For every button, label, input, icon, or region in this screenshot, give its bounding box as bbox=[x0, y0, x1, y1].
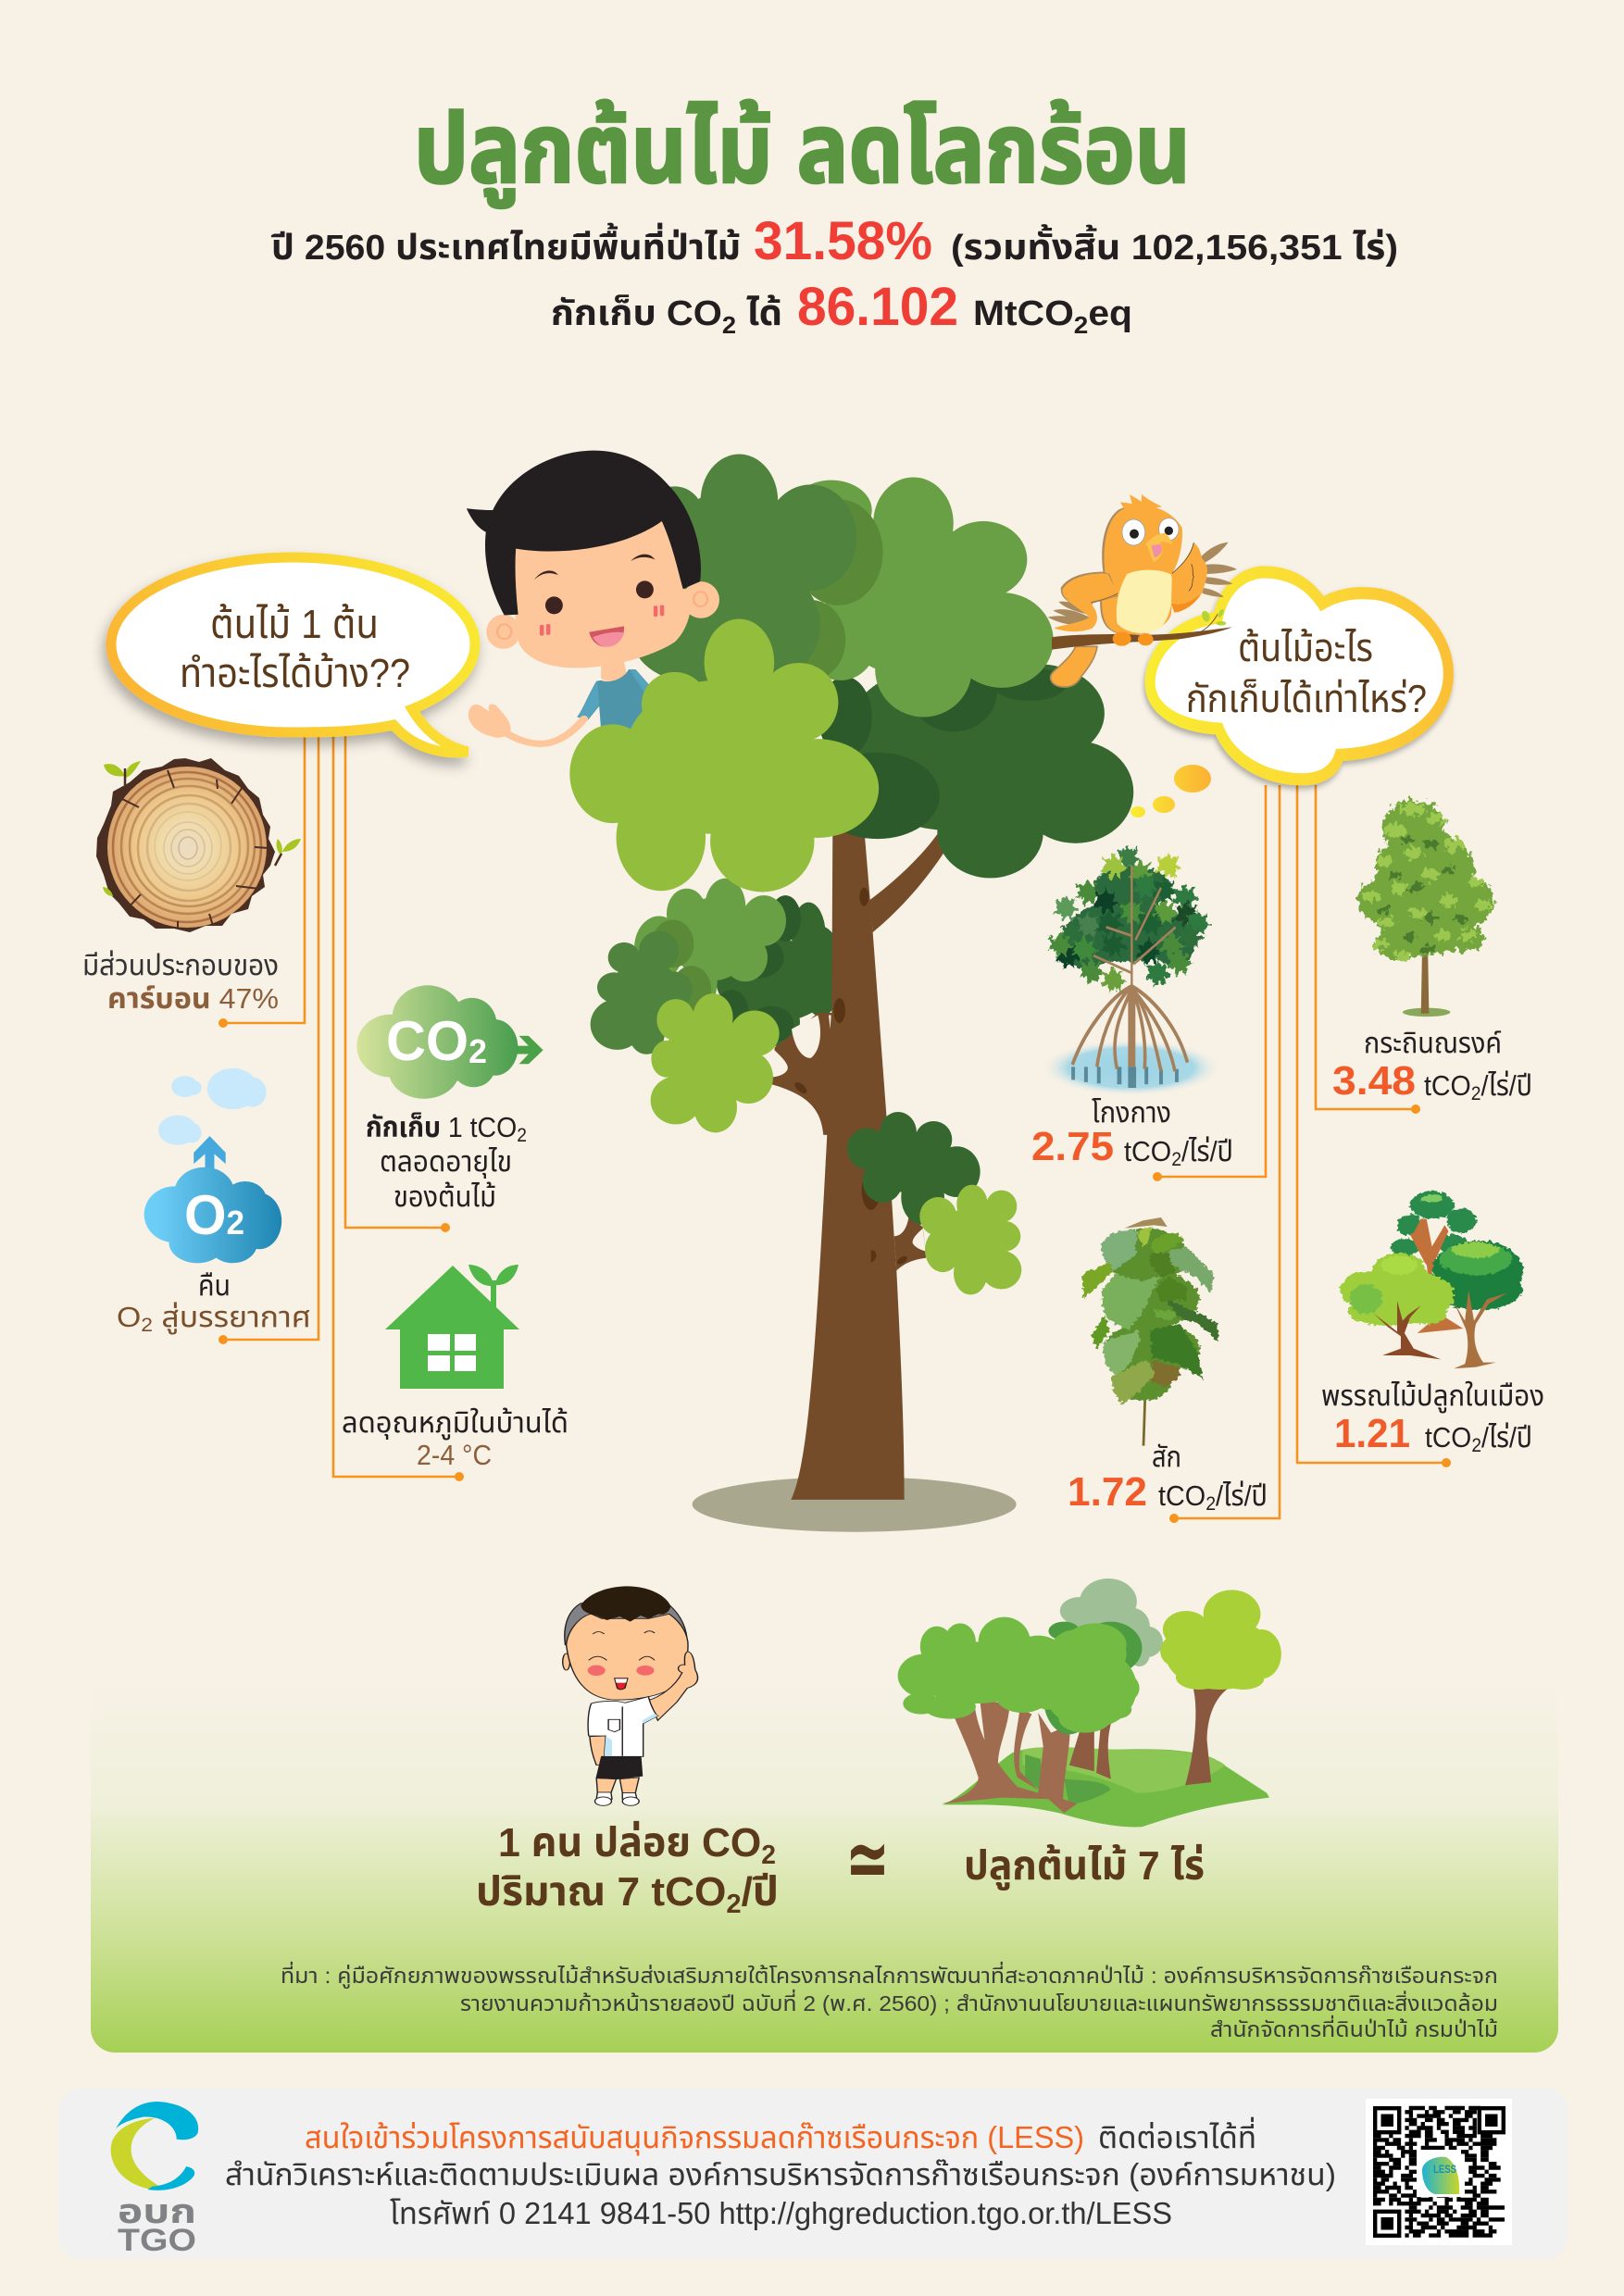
text: krathin rate: /ไร่/ปี bbox=[1481, 1069, 1532, 1102]
icon: O2 cloud with rising arrow bbox=[144, 1068, 281, 1263]
text: source note: รายงานความก้าวหน้ารายสองปี ฉบับที่ 2 (พ.ศ. 2560) ; สำนักงานนโยบายและแผนทรัพยากรธรรมชาติและสิ่งแวดล้อม bbox=[460, 1989, 1498, 2015]
icon: green house with sprout bbox=[385, 1265, 519, 1389]
logo: TGO: อบก bbox=[118, 2192, 196, 2230]
subtitle: carbon stored: eq bbox=[1088, 294, 1132, 333]
subtitle: carbon stored: 2 bbox=[722, 311, 736, 339]
subtitle: carbon stored: 2 bbox=[1074, 311, 1088, 339]
text: mangrove rate: โกงกาง bbox=[1092, 1096, 1171, 1129]
text: stores 1 tCO2 bbox=[366, 1111, 527, 1213]
text: krathin rate: tCO bbox=[1424, 1069, 1475, 1102]
text: stores 1 tCO2: ตลอดอายุไข bbox=[380, 1145, 512, 1179]
text: returns O2 to atmosphere bbox=[117, 1269, 311, 1336]
tree illustration with boy bbox=[467, 451, 1133, 1532]
text: one person emits CO2 bbox=[476, 1820, 779, 1919]
text: krathin rate bbox=[1332, 1027, 1532, 1104]
text: source note: ที่มา : คู่มือศักยภาพของพรรณไม้สำหรับส่งเสริมภายใต้โครงการกลไกการพัฒนาที่สะอาดภาคป่าไม้ : องค์การบริหารจัดการก๊าซเรือนกระจก bbox=[281, 1961, 1498, 1990]
text: contact information: ติดต่อเราได้ที่ bbox=[1098, 2116, 1256, 2154]
icon: O2 cloud with rising arrow: O bbox=[184, 1184, 228, 1246]
text: source note bbox=[281, 1961, 1498, 2041]
text: lowers home temperature bbox=[342, 1406, 568, 1471]
text: mangrove rate: tCO bbox=[1124, 1135, 1175, 1167]
subtitle: forest area: (รวมทั้งสิ้น 102,156,351 ไร่) bbox=[951, 223, 1398, 268]
subtitle: forest area bbox=[270, 211, 1398, 271]
icon: urban trees bbox=[1341, 1192, 1523, 1368]
text: urban trees rate bbox=[1321, 1379, 1544, 1456]
text: teak rate: /ไร่/ปี bbox=[1216, 1479, 1268, 1512]
panel: green comparison band bbox=[91, 1685, 1558, 2053]
text: urban trees rate: พรรณไม้ปลูกในเมือง bbox=[1321, 1379, 1544, 1413]
text: teak rate: tCO bbox=[1158, 1479, 1209, 1512]
text: one person emits CO2: 2 bbox=[761, 1841, 776, 1870]
subtitle: carbon stored: กักเก็บ CO bbox=[551, 294, 714, 333]
speech bubble: what can a tree do bbox=[111, 557, 475, 753]
text: one person emits CO2: ปริมาณ 7 tCO bbox=[476, 1869, 725, 1915]
text: carbon 47%: มีส่วนประกอบของ bbox=[82, 949, 279, 981]
text: one person emits CO2: 1 คน ปล่อย CO bbox=[498, 1820, 768, 1866]
text: one person emits CO2: 2 bbox=[726, 1890, 742, 1919]
text: one person emits CO2: /ปี bbox=[742, 1869, 779, 1915]
text: urban trees rate: /ไร่/ปี bbox=[1481, 1421, 1532, 1454]
icon: bird on a branch bbox=[1048, 494, 1237, 687]
text: urban trees rate: tCO bbox=[1425, 1421, 1476, 1454]
icon: student boy bbox=[563, 1586, 698, 1805]
text: contact information: สำนักวิเคราะห์และติดตามประเมินผล องค์การบริหารจัดการก๊าซเรือนกระจก (องค์การมหาชน) bbox=[225, 2157, 1336, 2191]
logo: TGO: TGO bbox=[118, 2223, 196, 2258]
text: stores 1 tCO2: กักเก็บ 1 tCO bbox=[366, 1111, 524, 1143]
subtitle: forest area: 31.58% bbox=[754, 211, 932, 271]
text: contact information bbox=[225, 2116, 1336, 2230]
text: carbon 47% bbox=[82, 949, 279, 1015]
QR code: LESS bbox=[1433, 2163, 1456, 2176]
text: mangrove rate bbox=[1031, 1096, 1233, 1170]
tree trunk and lower foliage bbox=[591, 829, 1021, 1532]
icon: mangrove tree bbox=[1042, 844, 1220, 1096]
icon: CO2 cloud bbox=[356, 985, 543, 1099]
subtitle: carbon stored bbox=[551, 277, 1132, 339]
logo: TGO bbox=[111, 2102, 198, 2258]
speech bubble: what can a tree do: ต้นไม้ 1 ต้น bbox=[210, 602, 379, 647]
subtitle: carbon stored: ได้ bbox=[736, 294, 782, 333]
text: mangrove rate: /ไร่/ปี bbox=[1181, 1135, 1233, 1167]
text: teak rate: สัก bbox=[1152, 1441, 1181, 1473]
text: urban trees rate: 1.21 bbox=[1334, 1411, 1410, 1456]
text: returns O2 to atmosphere: คืน bbox=[198, 1269, 231, 1302]
boy character bbox=[467, 451, 719, 743]
thought bubble: which tree stores how much: กักเก็บได้เท่าไหร่? bbox=[1186, 677, 1427, 720]
text: mangrove rate: 2 bbox=[1171, 1149, 1181, 1170]
text: returns O2 to atmosphere: สู่บรรยากาศ bbox=[153, 1301, 311, 1334]
text: krathin rate: กระถินณรงค์ bbox=[1364, 1027, 1502, 1059]
icon: CO2 cloud: 2 bbox=[468, 1032, 487, 1070]
panel: footer contact bbox=[58, 2089, 1568, 2259]
subtitle: carbon stored: MtCO bbox=[973, 294, 1067, 333]
text: teak rate: 2 bbox=[1206, 1493, 1216, 1515]
text: teak rate bbox=[1068, 1441, 1268, 1515]
text: teak rate: 1.72 bbox=[1068, 1469, 1147, 1515]
text: source note: สำนักจัดการที่ดินป่าไม้ กรมป่าไม้ bbox=[1210, 2015, 1498, 2041]
text: lowers home temperature: 2-4 °C bbox=[417, 1439, 492, 1471]
title: ปลูกต้นไม้ ลดโลกร้อน bbox=[414, 95, 1191, 208]
text: contact information: โทรศัพท์ 0 2141 9841-50 http://ghgreduction.tgo.or.th/LESS bbox=[390, 2196, 1172, 2230]
text: returns O2 to atmosphere: O bbox=[117, 1301, 139, 1333]
text: krathin rate: 2 bbox=[1471, 1083, 1481, 1104]
QR code bbox=[1366, 2099, 1512, 2245]
right connector lines bbox=[1153, 785, 1451, 1523]
approximately equal symbol: ≃ bbox=[845, 1810, 890, 1907]
text: contact information: สนใจเข้าร่วมโครงการสนับสนุนกิจกรรมลดก๊าซเรือนกระจก (LESS) bbox=[305, 2120, 1084, 2156]
text: plant 7 rai: ปลูกต้นไม้ 7 ไร่ bbox=[964, 1843, 1205, 1890]
text: carbon 47%: คาร์บอน 47% bbox=[107, 982, 279, 1015]
icon: O2 cloud with rising arrow: 2 bbox=[226, 1204, 244, 1242]
icon: teak sapling bbox=[1082, 1217, 1218, 1446]
text: stores 1 tCO2: ของต้นไม้ bbox=[394, 1180, 496, 1213]
thought bubble: which tree stores how much: ต้นไม้อะไร bbox=[1238, 626, 1373, 669]
text: mangrove rate: 2.75 bbox=[1031, 1124, 1114, 1169]
thought bubble: which tree stores how much bbox=[1131, 572, 1448, 817]
text: krathin rate: 3.48 bbox=[1332, 1058, 1416, 1104]
main tree crown front layer bbox=[569, 618, 879, 892]
icon: tree log cross-section bbox=[96, 758, 301, 932]
subtitle: carbon stored: 86.102 bbox=[797, 277, 958, 337]
left connector lines bbox=[219, 736, 464, 1481]
text: lowers home temperature: ลดอุณหภูมิในบ้านได้ bbox=[342, 1406, 568, 1440]
text: returns O2 to atmosphere: 2 bbox=[141, 1315, 153, 1336]
subtitle: forest area: ปี 2560 ประเทศไทยมีพื้นที่ป่าไม้ bbox=[270, 222, 741, 268]
text: urban trees rate: 2 bbox=[1471, 1435, 1481, 1456]
icon: krathin narong tree bbox=[1357, 800, 1494, 1017]
icon: forest on a green hill bbox=[898, 1578, 1281, 1828]
icon: CO2 cloud: CO bbox=[386, 1010, 469, 1072]
text: stores 1 tCO2: 2 bbox=[517, 1125, 527, 1146]
main tree crown back layers bbox=[633, 455, 1133, 878]
speech bubble: what can a tree do: ทำอะไรได้บ้าง?? bbox=[180, 651, 410, 696]
